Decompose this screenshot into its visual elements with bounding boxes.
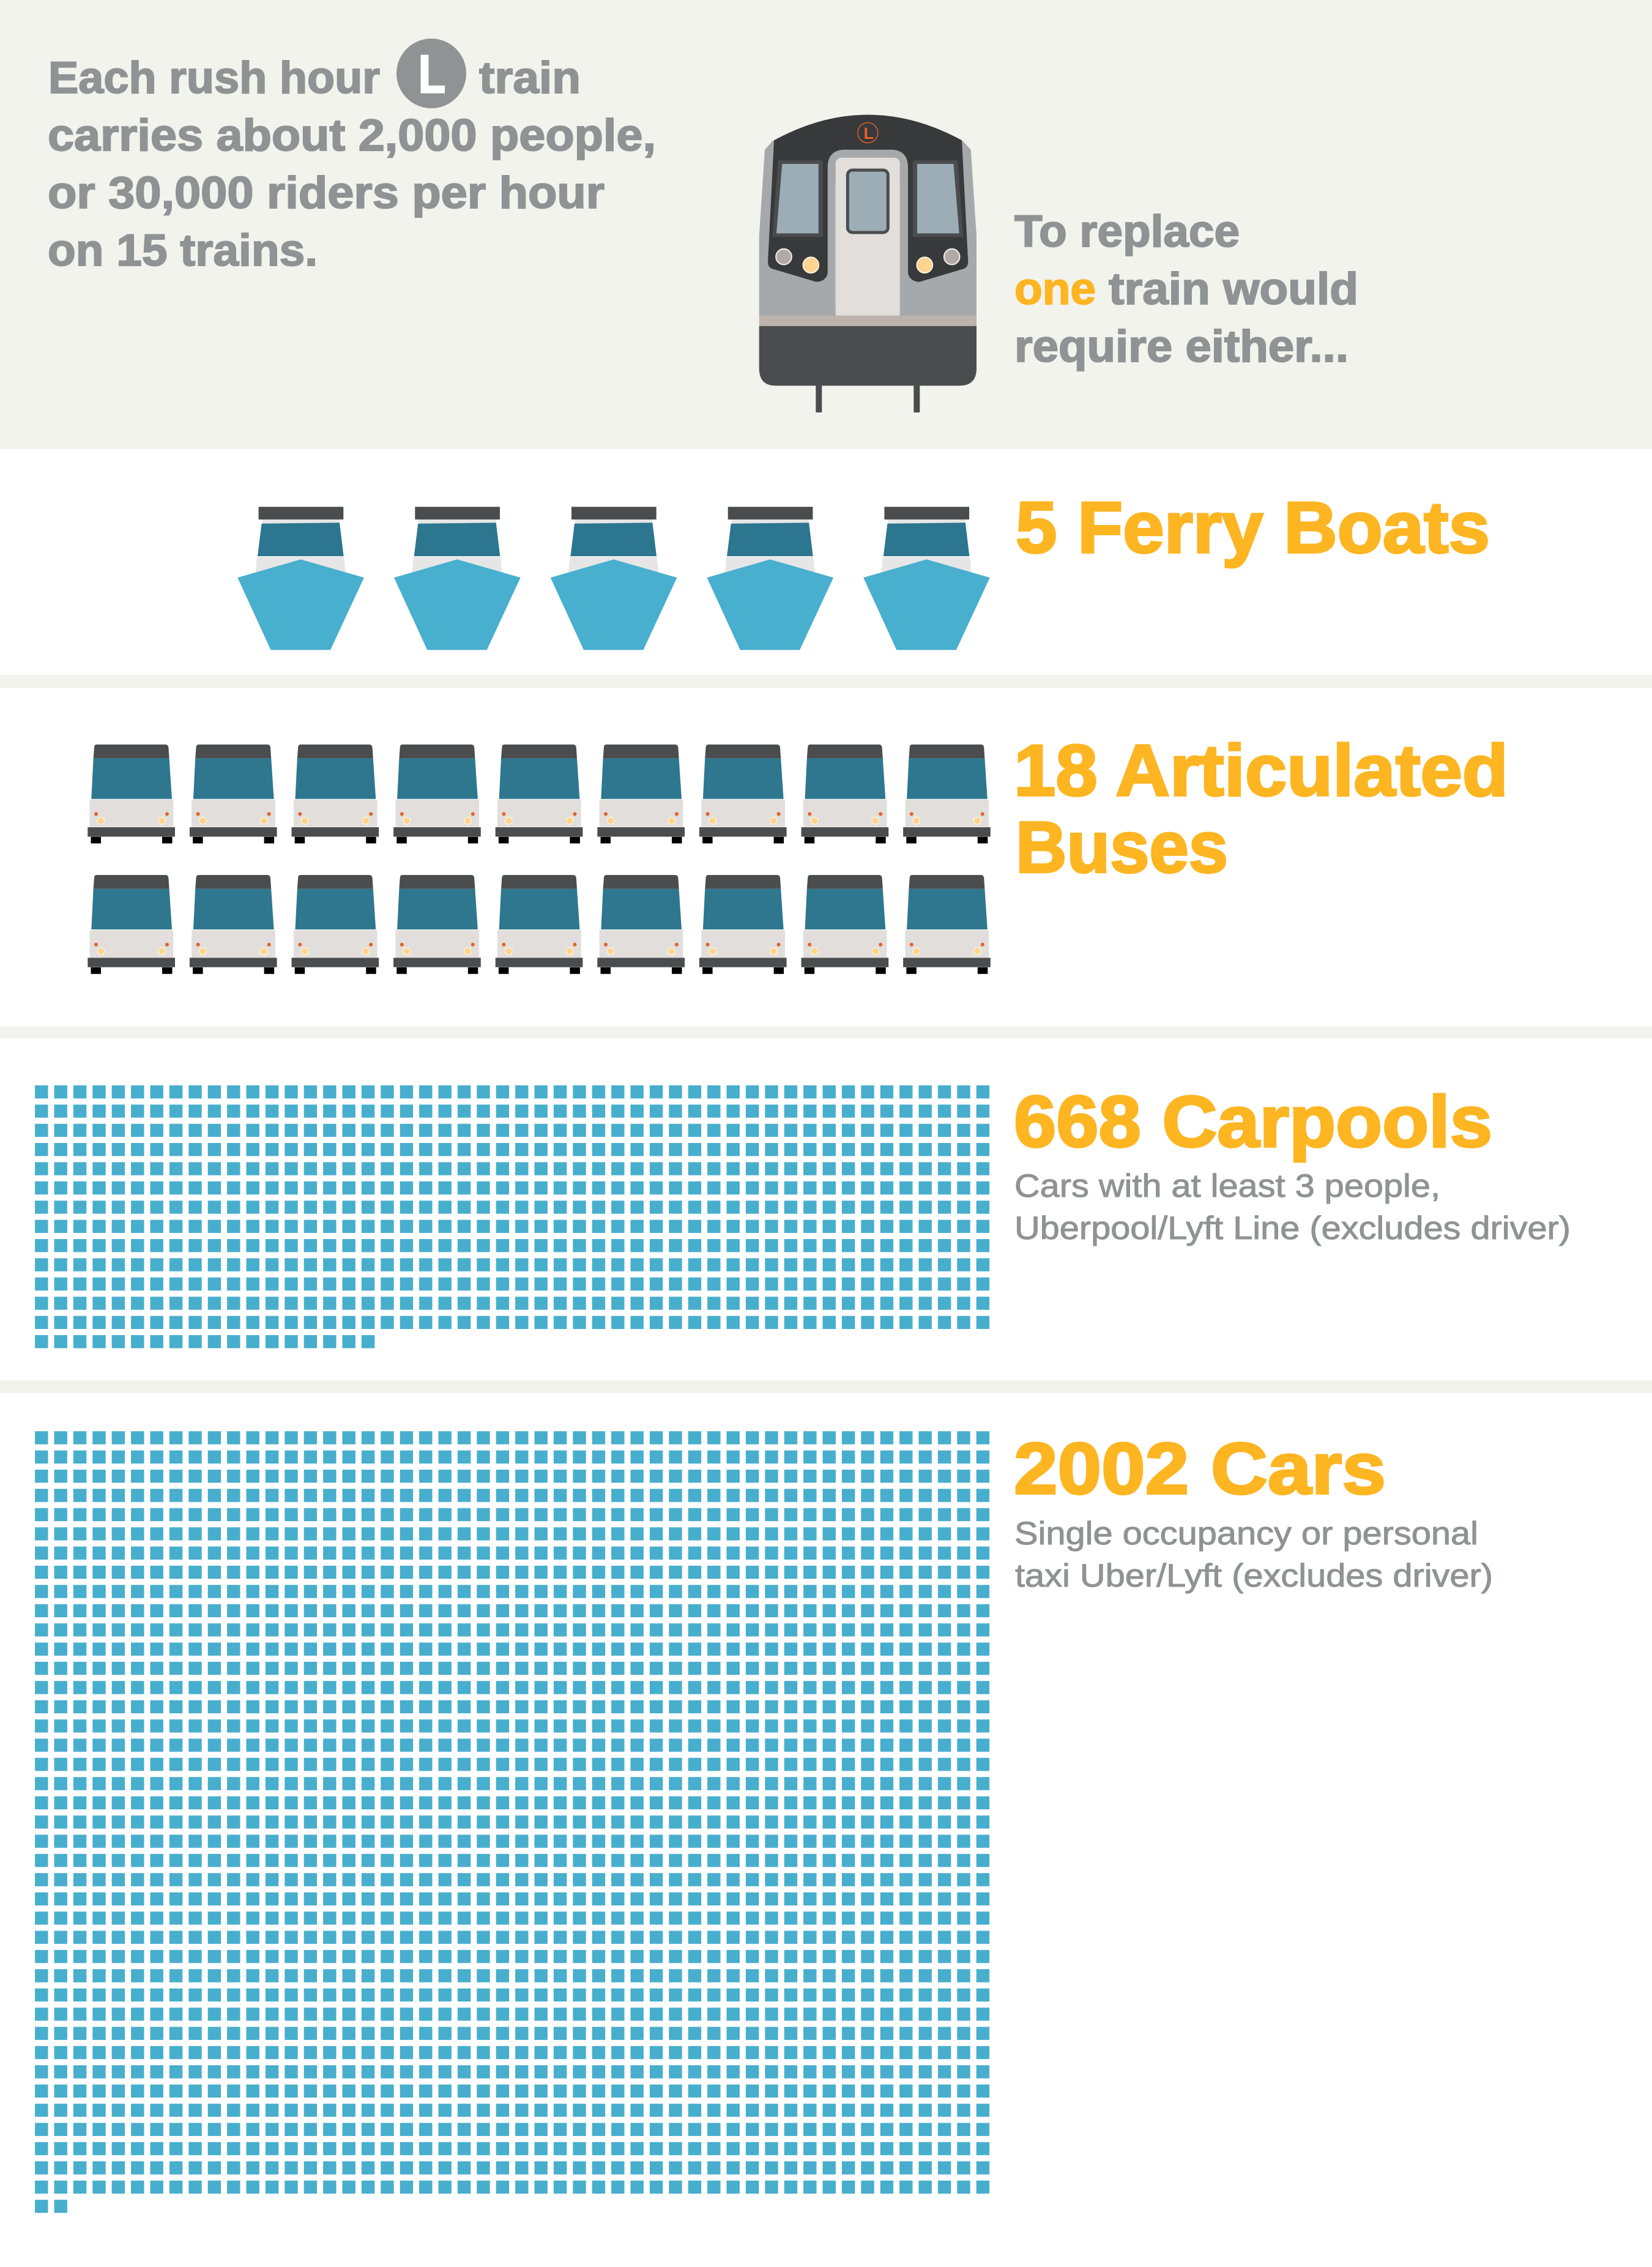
text: L train capacity: train [479, 53, 581, 103]
text: L train capacity [48, 53, 656, 275]
text: L train capacity: on 15 trains. [48, 226, 318, 275]
heading: 5 ferry boats: 5 Ferry Boats [1016, 487, 1490, 568]
text: carpool description [1014, 1168, 1571, 1246]
divider band 3 [0, 1380, 1652, 1393]
divider band 1 [0, 675, 1652, 688]
text: cars description: taxi Uber/Lyft (excludes driver) [1015, 1558, 1493, 1594]
heading: 18 articulated buses: 18 Articulated [1014, 730, 1508, 811]
text: to replace one train: train would [1109, 264, 1358, 314]
intro panel background [0, 0, 1652, 449]
heading: 18 articulated buses [1014, 730, 1508, 888]
icon: ferry 1 [237, 507, 364, 650]
panel: intro [0, 0, 1652, 449]
icon: ferry 2 [394, 507, 521, 650]
panel: ferry boats [237, 487, 1490, 650]
panel: cars [35, 1428, 1493, 2206]
text: L train capacity: or 30,000 riders per hour [48, 168, 605, 218]
panel: articulated buses [87, 730, 1508, 974]
icon: ferry 4 [707, 507, 833, 650]
unit chart: 668 carpool squares [35, 1092, 989, 1342]
icon: ferry 3 [551, 507, 677, 650]
icon: L line badge [396, 39, 466, 108]
icon: subway train front: L [864, 124, 874, 143]
divider band 2 [0, 1026, 1652, 1038]
text: to replace one train: To replace [1014, 207, 1240, 256]
text: carpool description: Cars with at least 3 people, [1014, 1168, 1440, 1204]
unit chart: 2002 car squares [35, 1438, 989, 2206]
icon: ferry 5 [863, 507, 990, 650]
text: to replace one train: require either... [1014, 322, 1349, 371]
icons: first row of nine buses [87, 745, 991, 843]
icon: subway train front [759, 115, 977, 412]
heading: 18 articulated buses: Buses [1016, 806, 1228, 888]
icons: five ferry boats [237, 507, 990, 650]
icons: second row of nine buses [87, 875, 991, 974]
text: L train capacity: carries about 2,000 people, [48, 111, 656, 160]
text: L train capacity: Each rush hour [48, 53, 380, 103]
text: cars description: Single occupancy or personal [1014, 1516, 1478, 1552]
text: cars description [1014, 1516, 1493, 1594]
text: carpool description: Uberpool/Lyft Line (excludes driver) [1014, 1210, 1571, 1246]
text: to replace one train: one [1014, 264, 1096, 314]
heading: 668 carpools: 668 Carpools [1014, 1081, 1492, 1163]
text: to replace one train [1014, 207, 1358, 371]
panel: carpools [35, 1081, 1571, 1342]
heading: 2002 cars: 2002 Cars [1014, 1428, 1386, 1509]
icon: L line badge: L [419, 45, 445, 104]
